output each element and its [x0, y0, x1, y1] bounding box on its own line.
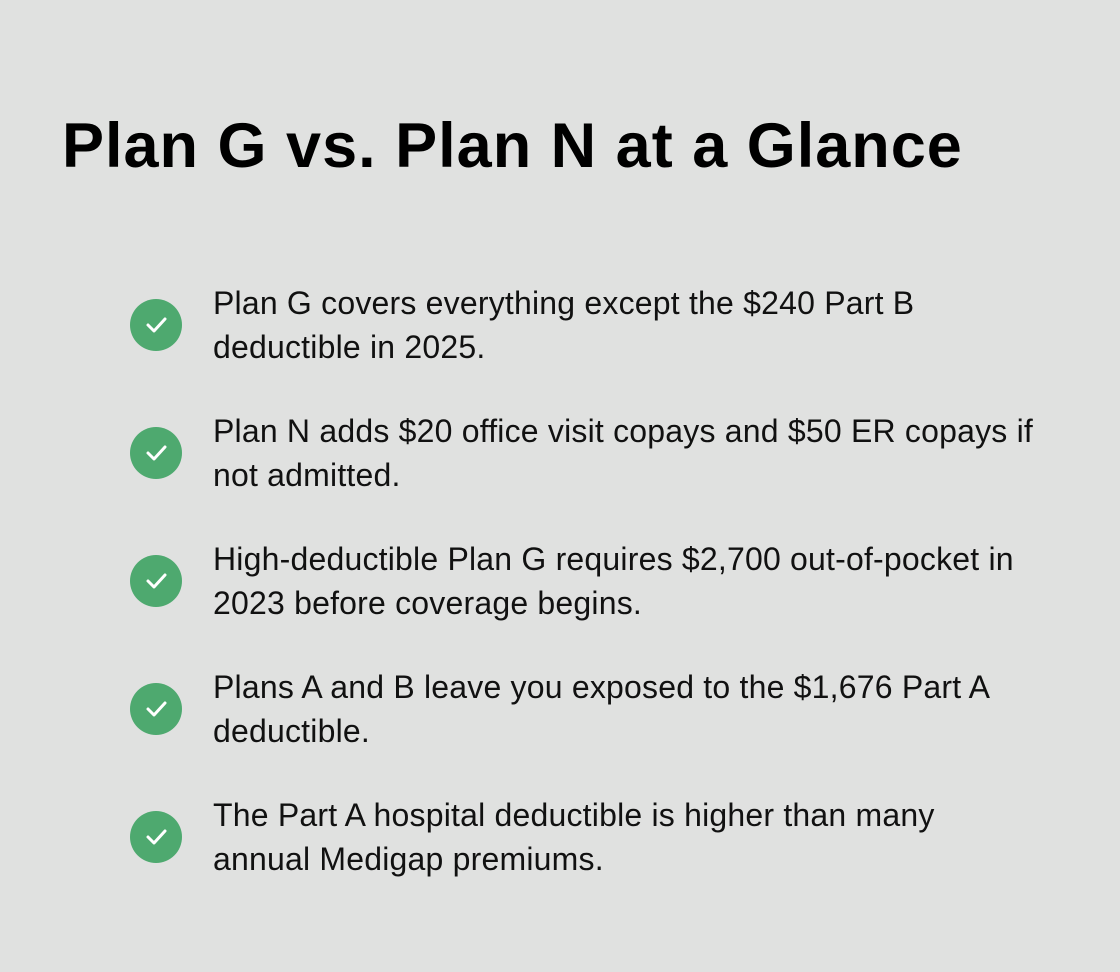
item 1: [130, 285, 914, 365]
text: 2023 before coverage begins.: [213, 585, 642, 621]
icon: check: [130, 427, 182, 479]
text: [213, 797, 935, 877]
icon: check: [130, 555, 182, 607]
icon: check: [130, 299, 182, 351]
item 5: [130, 797, 935, 877]
text: Plan N adds $20 office visit copays and $50 ER copays if: [213, 413, 1033, 449]
text: not admitted.: [213, 457, 401, 493]
text: deductible.: [213, 713, 370, 749]
text: [213, 669, 990, 749]
text: Plans A and B leave you exposed to the $1,676 Part A: [213, 669, 990, 705]
icon: check: [130, 811, 182, 863]
text: Plan G covers everything except the $240 Part B: [213, 285, 914, 321]
text: The Part A hospital deductible is higher than many: [213, 797, 935, 833]
text: deductible in 2025.: [213, 329, 485, 365]
text: [213, 413, 1033, 493]
icon: check: [130, 683, 182, 735]
item 2: [130, 413, 1033, 493]
text: [213, 285, 914, 365]
text: High-deductible Plan G requires $2,700 out-of-pocket in: [213, 541, 1014, 577]
item 4: [130, 669, 990, 749]
title: Plan G vs. Plan N at a Glance: [62, 111, 963, 181]
text: [213, 541, 1014, 621]
text: annual Medigap premiums.: [213, 841, 604, 877]
item 3: [130, 541, 1014, 621]
